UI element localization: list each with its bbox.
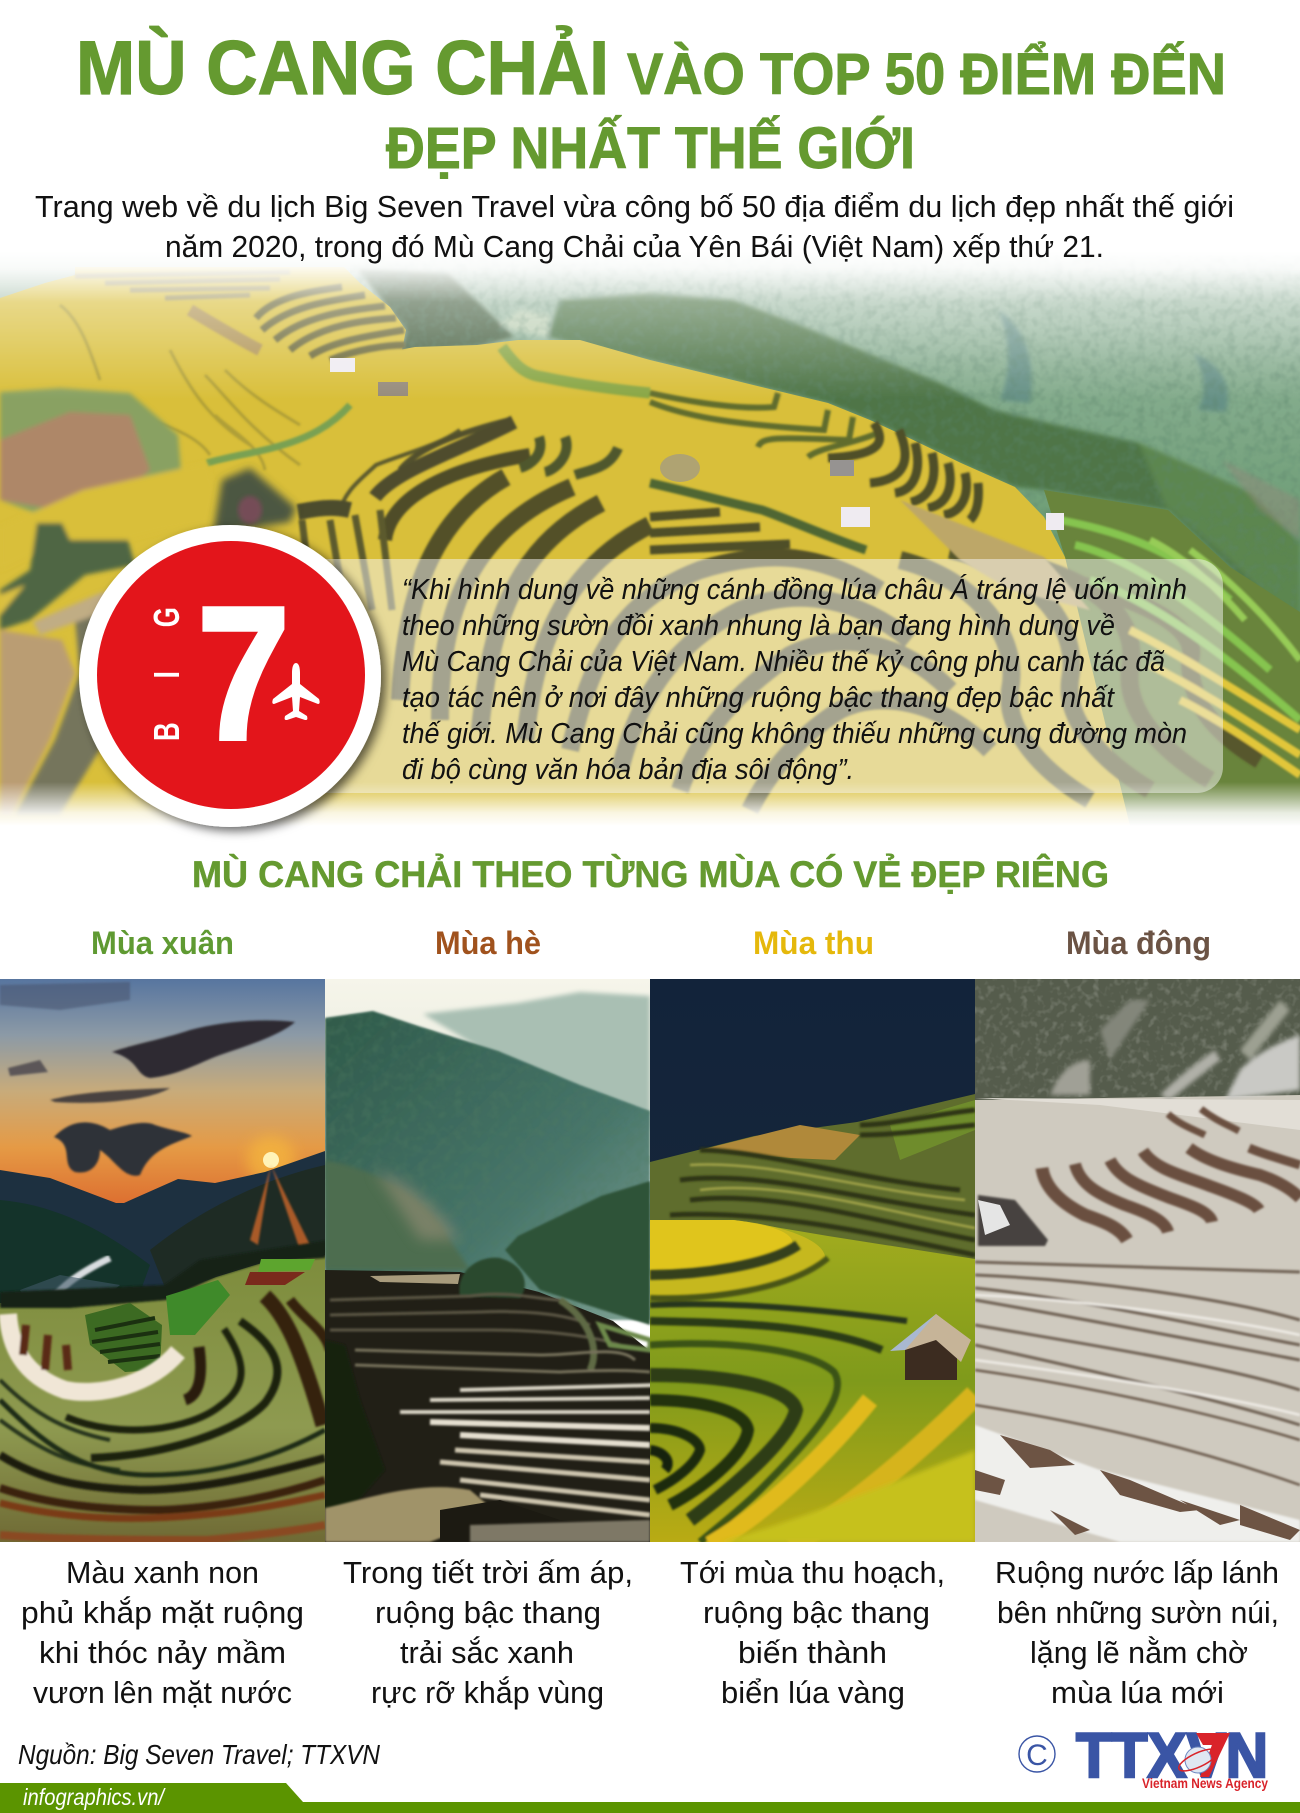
season labels: Mùa đông: [1066, 925, 1211, 961]
caption: winter: [995, 1555, 1279, 1710]
hero: yellow terraces: [0, 267, 1128, 820]
caption: spring: khi thóc nảy mầm: [39, 1635, 286, 1670]
caption: spring: vươn lên mặt nước: [33, 1675, 292, 1710]
quote text: Mù Cang Chải của Việt Nam. Nhiều thế kỷ công phu canh tác đã: [402, 646, 1165, 678]
intro text: năm 2020, trong đó Mù Cang Chải của Yên Bái (Việt Nam) xếp thứ 21.: [165, 229, 1104, 264]
icon: hut: [890, 1314, 971, 1380]
quote text: đi bộ cùng văn hóa bản địa sôi động”.: [402, 754, 854, 786]
caption: summer: Trong tiết trời ấm áp,: [343, 1555, 633, 1590]
quote text: [402, 573, 1187, 786]
photo: summer: [325, 979, 660, 1542]
photo: spring: [0, 979, 330, 1542]
badge: Big 7: 7: [197, 568, 290, 780]
season labels: Mùa hè: [435, 925, 541, 961]
caption: autumn: biển lúa vàng: [721, 1675, 905, 1710]
intro text: Trang web về du lịch Big Seven Travel vừa công bố 50 địa điểm du lịch đẹp nhất thế giới: [35, 189, 1234, 224]
footer band: infographics.vn/: [23, 1784, 166, 1810]
footer band: [0, 1783, 1300, 1813]
quote text: “Khi hình dung về những cánh đồng lúa châu Á tráng lệ uốn mình: [402, 573, 1187, 606]
caption: autumn: Tới mùa thu hoạch,: [680, 1555, 945, 1590]
quote text: thế giới. Mù Cang Chải cũng không thiếu những cung đường mòn: [402, 718, 1187, 750]
caption: summer: trải sắc xanh: [400, 1635, 574, 1670]
section heading: MÙ CANG CHẢI THEO TỪNG MÙA CÓ VẺ ĐẸP RIÊNG: [192, 853, 1109, 895]
caption: autumn: [680, 1555, 945, 1710]
callout: quote panel: [300, 559, 1223, 793]
caption: spring: Màu xanh non: [66, 1555, 259, 1590]
season labels: Mùa xuân: [91, 925, 234, 961]
icon: airplane: [272, 663, 320, 720]
photo: autumn: [650, 979, 975, 1545]
title: MÙ CANG CHẢI: [76, 26, 609, 111]
logo: TTXVN: C: [1026, 1739, 1048, 1772]
caption: spring: phủ khắp mặt ruộng: [21, 1595, 304, 1630]
quote text: theo những sườn đồi xanh nhung là bạn đang hình dung về: [402, 610, 1115, 642]
caption: autumn: biến thành: [738, 1635, 887, 1670]
caption: summer: rực rỡ khắp vùng: [371, 1675, 604, 1710]
intro text: [35, 189, 1234, 264]
caption: winter: bên những sườn núi,: [997, 1595, 1279, 1630]
badge: Big 7: BIG: [147, 607, 187, 741]
caption: winter: Ruộng nước lấp lánh: [995, 1555, 1279, 1590]
photo: winter: [975, 979, 1300, 1542]
season labels: Mùa thu: [753, 925, 874, 961]
caption: summer: ruộng bậc thang: [375, 1595, 601, 1630]
badge: Big 7: [79, 525, 381, 827]
logo: TTXVN: TTXVN: [1076, 1721, 1268, 1791]
captions: [21, 1555, 1279, 1710]
caption: winter: mùa lúa mới: [1051, 1675, 1224, 1710]
caption: autumn: ruộng bậc thang: [703, 1595, 930, 1630]
logo: TTXVN: Vietnam News Agency: [1142, 1776, 1268, 1791]
title: ĐẸP NHẤT THẾ GIỚI: [386, 116, 915, 181]
title: VÀO TOP 50 ĐIỂM ĐẾN: [627, 42, 1226, 107]
caption: summer: [343, 1555, 633, 1710]
hero photo: rice terraces: [0, 250, 1300, 826]
title: [76, 26, 1226, 181]
caption: winter: lặng lẽ nằm chờ: [1030, 1635, 1248, 1670]
caption: spring: [21, 1555, 304, 1710]
quote text: tạo tác nên ở nơi đây những ruộng bậc thang đẹp bậc nhất: [402, 682, 1116, 714]
source note: Nguồn: Big Seven Travel; TTXVN: [18, 1739, 381, 1770]
season labels: [91, 925, 1211, 961]
